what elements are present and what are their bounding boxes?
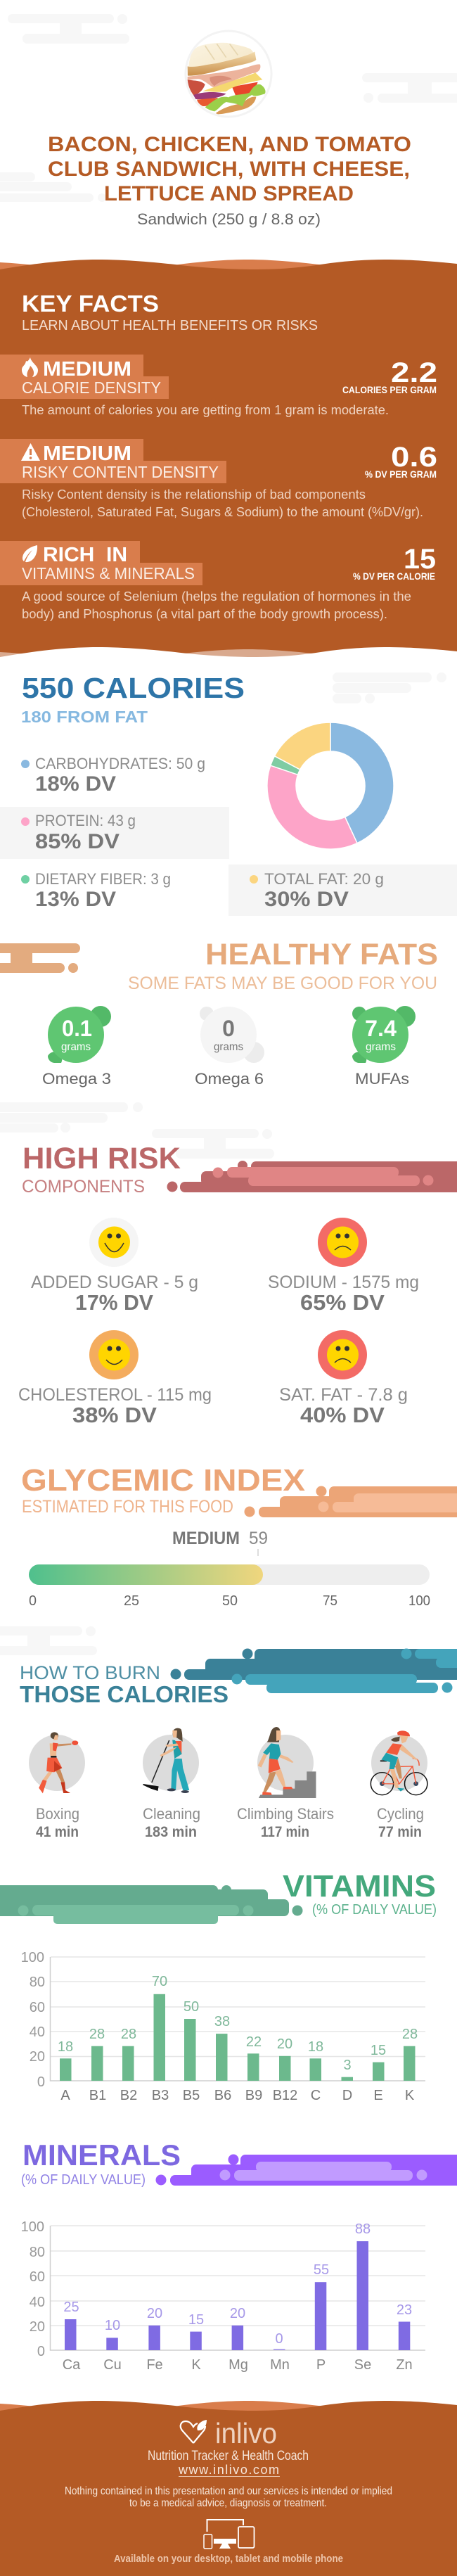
bar chart: vitamins: 18 — [308, 2039, 323, 2055]
MUFAs: grams — [366, 1041, 396, 1053]
bar chart: vitamins: 20 — [30, 2049, 45, 2065]
saturated fat: 40% DV — [300, 1403, 385, 1427]
bar chart: minerals: 23 — [397, 2302, 412, 2318]
fact: rich in vitamins and minerals — [0, 541, 436, 621]
panel: healthy fats — [0, 938, 438, 1088]
bar chart: minerals: 40 — [30, 2295, 45, 2310]
fact: rich in vitamins and minerals: body) and Phosphorus (a vital part of the body growth process). — [22, 607, 387, 621]
bar chart: minerals: 15 — [188, 2312, 204, 2328]
bar chart: vitamins: C — [311, 2088, 321, 2103]
bar chart: vitamins: 28 — [121, 2027, 136, 2042]
bar chart: minerals: P — [316, 2357, 326, 2373]
fact: risky content density: % DV PER GRAM — [365, 468, 437, 480]
MUFAs — [352, 1006, 416, 1088]
bar chart: vitamins: D — [342, 2088, 352, 2103]
panel: high risk components — [18, 1142, 457, 1427]
sandwich photo illustration — [186, 31, 271, 117]
bar chart: vitamins: 40 — [30, 2025, 45, 2040]
activity: climbing stairs — [237, 1727, 334, 1840]
website link: www.inlivo.com — [178, 2463, 279, 2477]
added sugar — [31, 1218, 198, 1315]
activity: cycling — [371, 1730, 427, 1840]
gauge scale: 50 — [222, 1593, 238, 1609]
bar chart: vitamins: 22 — [246, 2034, 262, 2050]
bar chart: minerals: Zn — [396, 2357, 413, 2373]
dietary fiber: 13% DV — [35, 888, 116, 911]
minerals subheading: (% OF DAILY VALUE) — [21, 2172, 146, 2188]
panel: vitamins — [0, 1869, 437, 2103]
bar chart: minerals: Mg — [228, 2357, 248, 2373]
bar chart: vitamins: 100 — [21, 1950, 44, 1965]
cholesterol: 38% DV — [72, 1403, 157, 1427]
fact: calorie density — [0, 355, 437, 417]
activity: cycling: Cycling — [377, 1805, 424, 1823]
bar chart: minerals: Ca — [63, 2357, 81, 2373]
vitamins subheading: (% OF DAILY VALUE) — [312, 1902, 437, 1918]
icon: leaf — [22, 545, 37, 562]
bar chart: minerals: 100 — [21, 2219, 44, 2235]
fact: calorie density: CALORIE DENSITY — [22, 378, 161, 397]
fact: risky content density: 0.6 — [391, 442, 437, 473]
bar chart: minerals: Se — [354, 2357, 371, 2373]
glycemic gauge — [29, 1564, 430, 1585]
bar chart: vitamins: 28 — [89, 2027, 105, 2042]
bar chart: minerals — [21, 2219, 425, 2373]
bar chart: minerals: Fe — [146, 2357, 163, 2373]
icon: devices — [204, 2520, 255, 2549]
how to burn heading — [20, 1662, 228, 1707]
activity: cycling: 77 min — [378, 1824, 422, 1840]
minerals heading: MINERALS — [22, 2138, 181, 2172]
bar chart: minerals: 0 — [275, 2331, 283, 2347]
bar chart: vitamins: B6 — [214, 2088, 231, 2103]
decorative cloud: teal — [170, 1649, 457, 1693]
bar chart: vitamins: B3 — [152, 2088, 169, 2103]
bar chart: minerals: 20 — [230, 2306, 245, 2321]
gauge scale: 25 — [124, 1593, 139, 1609]
omega 3: 0.1 — [62, 1016, 92, 1041]
bar chart: vitamins: B9 — [245, 2088, 262, 2103]
bar chart: minerals: Mn — [270, 2357, 290, 2373]
bar chart: vitamins: 80 — [30, 1975, 45, 1990]
availability note: Available on your desktop, tablet and mobile phone — [114, 2553, 343, 2565]
bar chart: minerals: K — [191, 2357, 201, 2373]
cholesterol — [18, 1330, 212, 1427]
activity: climbing stairs: Climbing Stairs — [237, 1805, 334, 1823]
MUFAs: 7.4 — [365, 1016, 397, 1041]
bar chart: vitamins: 3 — [343, 2058, 352, 2073]
omega 3: Omega 3 — [42, 1070, 111, 1088]
how to burn heading: HOW TO BURN — [20, 1662, 160, 1683]
icon: warning triangle — [21, 443, 40, 461]
carbohydrates: CARBOHYDRATES: 50 g — [35, 755, 205, 772]
added sugar: 17% DV — [75, 1290, 153, 1315]
saturated fat: SAT. FAT - 7.8 g — [279, 1385, 408, 1405]
activity: boxing: Boxing — [36, 1805, 79, 1823]
title: LETTUCE AND SPREAD — [104, 182, 354, 205]
bar chart: minerals: 60 — [30, 2269, 45, 2285]
calories heading: 550 CALORIES — [22, 672, 245, 704]
bar chart: vitamins: A — [60, 2088, 70, 2103]
protein: PROTEIN: 43 g — [35, 812, 136, 829]
carbohydrates — [21, 755, 205, 796]
bar chart: vitamins: 15 — [371, 2043, 386, 2058]
fact: risky content density: (Cholesterol, Saturated Fat, Sugars & Sodium) to the amount (%DV/gr). — [22, 505, 423, 519]
fact: calorie density: The amount of calories you are getting from 1 gram is moderate. — [22, 403, 389, 417]
sodium: SODIUM - 1575 mg — [268, 1273, 419, 1292]
bar chart: vitamins: 20 — [277, 2036, 292, 2052]
bar chart: vitamins: B1 — [89, 2088, 106, 2103]
glycemic value: 59 — [249, 1529, 268, 1548]
decorative cloud: red — [167, 1161, 457, 1192]
activity: cleaning: 183 min — [145, 1824, 197, 1840]
panel: minerals — [21, 2138, 457, 2373]
panel: calories — [0, 672, 457, 916]
bar chart: minerals: 88 — [355, 2221, 371, 2237]
added sugar: ADDED SUGAR - 5 g — [31, 1273, 198, 1292]
fact: rich in vitamins and minerals: VITAMINS & MINERALS — [22, 564, 195, 582]
bar chart: minerals: 80 — [30, 2245, 45, 2260]
title: BACON, CHICKEN, AND TOMATO — [48, 133, 411, 156]
logo: inlivo heart — [181, 2420, 207, 2443]
omega 3 — [42, 1006, 111, 1088]
omega 6 — [195, 1007, 264, 1088]
fact: rich in vitamins and minerals: A good source of Selenium (helps the regulation of hormones in the — [22, 589, 411, 604]
activity: cleaning — [143, 1728, 200, 1840]
decorative cloud: orange — [245, 1486, 457, 1517]
fact: rich in vitamins and minerals: % DV PER CALORIE — [353, 570, 435, 582]
bar chart: vitamins: 70 — [152, 1974, 167, 1989]
calories from fat: 180 FROM FAT — [21, 708, 148, 726]
cholesterol: CHOLESTEROL - 115 mg — [18, 1385, 212, 1405]
dietary fiber — [21, 870, 171, 911]
activity: climbing stairs: 117 min — [261, 1824, 309, 1840]
fact: risky content density: Risky Content density is the relationship of bad components — [22, 487, 366, 502]
bar chart: vitamins: B12 — [273, 2088, 297, 2103]
protein: 85% DV — [35, 830, 120, 853]
activity: cleaning: Cleaning — [143, 1805, 200, 1823]
gauge scale — [29, 1593, 430, 1609]
title: CLUB SANDWICH, WITH CHEESE, — [48, 158, 410, 181]
healthy fats heading: HEALTHY FATS — [205, 938, 438, 971]
sodium — [268, 1218, 419, 1315]
how to burn heading: THOSE CALORIES — [20, 1681, 228, 1707]
glycemic index heading: GLYCEMIC INDEX — [21, 1463, 305, 1498]
gauge scale: 75 — [323, 1593, 337, 1609]
activity: boxing — [29, 1732, 85, 1840]
serving size: Sandwich (250 g / 8.8 oz) — [137, 210, 321, 228]
bar chart: vitamins: 18 — [58, 2039, 73, 2055]
gauge scale: 100 — [408, 1593, 430, 1609]
bar chart: vitamins: B5 — [183, 2088, 200, 2103]
title — [48, 133, 411, 205]
bar chart: minerals: 20 — [147, 2306, 162, 2321]
bar chart: vitamins — [21, 1950, 425, 2103]
high risk heading: HIGH RISK — [22, 1142, 181, 1175]
sodium: 65% DV — [300, 1290, 385, 1315]
bar chart: vitamins: E — [373, 2088, 383, 2103]
decorative cloud: tan — [0, 943, 80, 973]
fact: calorie density: CALORIES PER GRAM — [342, 384, 437, 395]
fact: rich in vitamins and minerals: 15 — [404, 544, 436, 575]
activity: boxing: 41 min — [36, 1824, 79, 1840]
donut chart — [267, 722, 394, 849]
total fat: TOTAL FAT: 20 g — [264, 870, 384, 888]
disclaimer — [65, 2485, 392, 2509]
glycemic value: MEDIUM — [172, 1529, 240, 1548]
bar chart: vitamins: 0 — [37, 2074, 45, 2090]
vitamins heading: VITAMINS — [283, 1869, 436, 1904]
key facts heading: KEY FACTS — [22, 291, 159, 317]
dietary fiber: DIETARY FIBER: 3 g — [35, 870, 171, 888]
bar chart: vitamins: 38 — [214, 2014, 230, 2029]
glycemic index subheading: ESTIMATED FOR THIS FOOD — [22, 1497, 233, 1517]
decorative cloud: purple — [156, 2154, 457, 2186]
icon: flame — [22, 357, 38, 377]
panel: how to burn those calories — [20, 1649, 457, 1840]
bar chart: minerals: 0 — [37, 2344, 45, 2359]
glycemic value — [172, 1529, 268, 1556]
bar chart: vitamins: 60 — [30, 2000, 45, 2015]
bar chart: minerals: 20 — [30, 2319, 45, 2335]
bar chart: minerals: 10 — [105, 2318, 120, 2333]
total fat — [250, 870, 384, 911]
bar chart: vitamins: 28 — [402, 2027, 418, 2042]
tagline: Nutrition Tracker & Health Coach — [148, 2449, 309, 2463]
total fat: 30% DV — [264, 888, 349, 911]
panel: key facts — [0, 260, 457, 665]
fact: risky content density — [0, 439, 437, 519]
fact: risky content density: RISKY CONTENT DENSITY — [22, 463, 219, 481]
fact: rich in vitamins and minerals: RICH IN — [43, 544, 127, 566]
protein — [21, 812, 136, 853]
disclaimer: Nothing contained in this presentation and our services is intended or implied — [65, 2485, 392, 2497]
bar chart: vitamins: K — [405, 2088, 415, 2103]
omega 6: grams — [214, 1041, 243, 1053]
omega 6: Omega 6 — [195, 1070, 264, 1088]
carbohydrates: 18% DV — [35, 772, 116, 796]
disclaimer: to be a medical advice, diagnosis or treatment. — [129, 2497, 327, 2509]
bar chart: minerals: 55 — [314, 2262, 329, 2278]
bar chart: minerals: Cu — [103, 2357, 122, 2373]
bar chart: minerals: 25 — [63, 2300, 79, 2315]
bar chart: vitamins: 50 — [184, 1999, 199, 2015]
fact: calorie density: MEDIUM — [43, 358, 131, 381]
key facts subheading: LEARN ABOUT HEALTH BENEFITS OR RISKS — [22, 318, 318, 333]
saturated fat — [279, 1330, 408, 1427]
panel: glycemic index — [21, 1463, 457, 1609]
omega 3: grams — [61, 1041, 91, 1053]
fact: risky content density: MEDIUM — [43, 442, 131, 465]
omega 6: 0 — [222, 1016, 235, 1041]
decorative cloud: green — [0, 1885, 302, 1924]
fact: calorie density: 2.2 — [391, 357, 437, 388]
gauge scale: 0 — [29, 1593, 37, 1609]
healthy fats subheading: SOME FATS MAY BE GOOD FOR YOU — [128, 974, 437, 993]
panel: footer — [0, 2401, 457, 2576]
logo wordmark: inlivo — [215, 2417, 277, 2449]
MUFAs: MUFAs — [355, 1070, 409, 1088]
high risk subheading: COMPONENTS — [22, 1177, 145, 1197]
bar chart: vitamins: B2 — [120, 2088, 137, 2103]
